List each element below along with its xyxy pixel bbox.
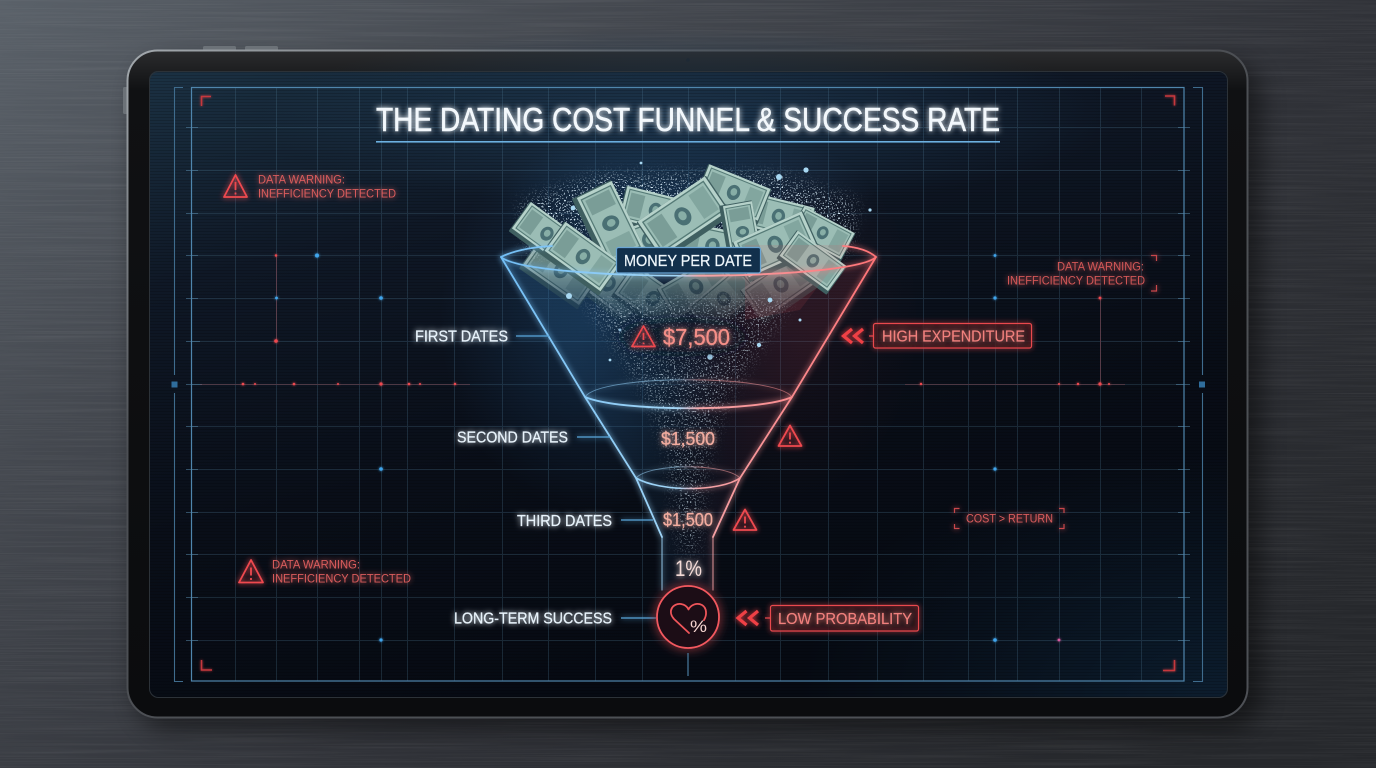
tablet bezel bbox=[128, 50, 1248, 718]
inner blueprint frame bbox=[192, 88, 1184, 681]
panel: tablet device bbox=[123, 28, 1262, 730]
particle spray bbox=[522, 176, 856, 552]
grid nodes bbox=[242, 254, 1110, 642]
label box bbox=[770, 606, 918, 631]
icon: warning triangle beside third dates bbox=[734, 510, 756, 530]
falling stream through the funnel bbox=[585, 300, 790, 552]
callout text: COST > RETURN bbox=[966, 512, 1053, 526]
warning brackets bbox=[1151, 256, 1156, 291]
funnel rims and edges bbox=[501, 246, 876, 590]
funnel right edge bbox=[713, 257, 876, 537]
top rim bbox=[501, 246, 876, 276]
funnel neck bbox=[662, 537, 713, 590]
red tint on right money bbox=[745, 245, 850, 320]
icon: warning triangle bbox=[632, 326, 655, 346]
loose particles bbox=[566, 162, 872, 361]
warning: bottom left bbox=[239, 558, 411, 586]
warning: top left bbox=[224, 172, 396, 200]
blueprint grid bbox=[174, 87, 1202, 682]
warning text: DATA WARNING: bbox=[272, 558, 360, 572]
third dates ring bbox=[636, 478, 740, 488]
callout: high expenditure bbox=[844, 324, 1032, 348]
stage label: third dates: THIRD DATES bbox=[517, 513, 612, 530]
money faded inside funnel bbox=[519, 249, 817, 324]
value: third dates $1,500: $1,500 bbox=[663, 510, 713, 530]
icon: warning triangle bbox=[239, 560, 263, 582]
warning text: INEFFICIENCY DETECTED bbox=[258, 186, 396, 200]
callout: cost greater than return bbox=[954, 508, 1064, 528]
label text: HIGH EXPENDITURE bbox=[882, 328, 1025, 346]
connector bbox=[869, 335, 873, 337]
panel: screen bbox=[149, 28, 1228, 698]
tablet drop shadow bbox=[136, 62, 1262, 730]
frame midpoint squares bbox=[172, 382, 1205, 388]
icon: warning triangle bbox=[224, 175, 247, 197]
icon: heart percent circle: % bbox=[690, 617, 707, 636]
highlighted grid segments bbox=[276, 255, 1100, 384]
label text: LOW PROBABILITY bbox=[778, 611, 912, 628]
icon: warning triangle beside second dates bbox=[778, 426, 802, 446]
stage label: long-term success: LONG-TERM SUCCESS bbox=[454, 610, 612, 628]
value: second dates $1,500: $1,500 bbox=[661, 429, 715, 449]
warning text: INEFFICIENCY DETECTED bbox=[1007, 274, 1145, 288]
money pile above rim bbox=[509, 164, 856, 296]
funnel glass body bbox=[501, 257, 876, 590]
funnel bbox=[472, 147, 882, 592]
dark backing behind value bbox=[620, 322, 744, 352]
spray above the pile and at rim sides bbox=[522, 176, 856, 252]
tablet side buttons bbox=[123, 46, 278, 114]
label box bbox=[874, 324, 1032, 348]
chevrons bbox=[738, 611, 758, 625]
amount: $7,500 bbox=[663, 324, 730, 350]
funnel left edge bbox=[501, 257, 662, 537]
warning text: INEFFICIENCY DETECTED bbox=[272, 572, 411, 586]
value: 1% success rate: 1% bbox=[675, 556, 702, 581]
stage label: second dates: SECOND DATES bbox=[457, 430, 568, 446]
title text: THE DATING COST FUNNEL & SUCCESS RATE bbox=[376, 101, 1000, 138]
icon: heart percent circle bbox=[657, 586, 719, 648]
outer blueprint brackets bbox=[174, 88, 1202, 682]
callout: low probability bbox=[738, 606, 918, 631]
title underline bbox=[376, 141, 1000, 143]
chevrons bbox=[844, 329, 863, 343]
second dates ring bbox=[585, 397, 792, 408]
funnel backlight bbox=[440, 125, 920, 510]
label: money per date: MONEY PER DATE bbox=[624, 253, 752, 270]
label: money per date bbox=[616, 248, 760, 273]
connector bbox=[765, 617, 770, 619]
funnel outlet line bbox=[687, 653, 689, 676]
callout brackets bbox=[954, 508, 1064, 528]
warning: top right bbox=[1007, 256, 1156, 291]
corner brackets: red targeting marks bbox=[202, 96, 1174, 670]
warning text: DATA WARNING: bbox=[1057, 260, 1144, 274]
value: first dates $7,500 bbox=[632, 324, 730, 350]
frame tick marks bbox=[186, 128, 1190, 640]
stage label: first dates: FIRST DATES bbox=[415, 328, 508, 346]
warning text: DATA WARNING: bbox=[258, 172, 345, 186]
tablet camera bbox=[686, 58, 690, 62]
